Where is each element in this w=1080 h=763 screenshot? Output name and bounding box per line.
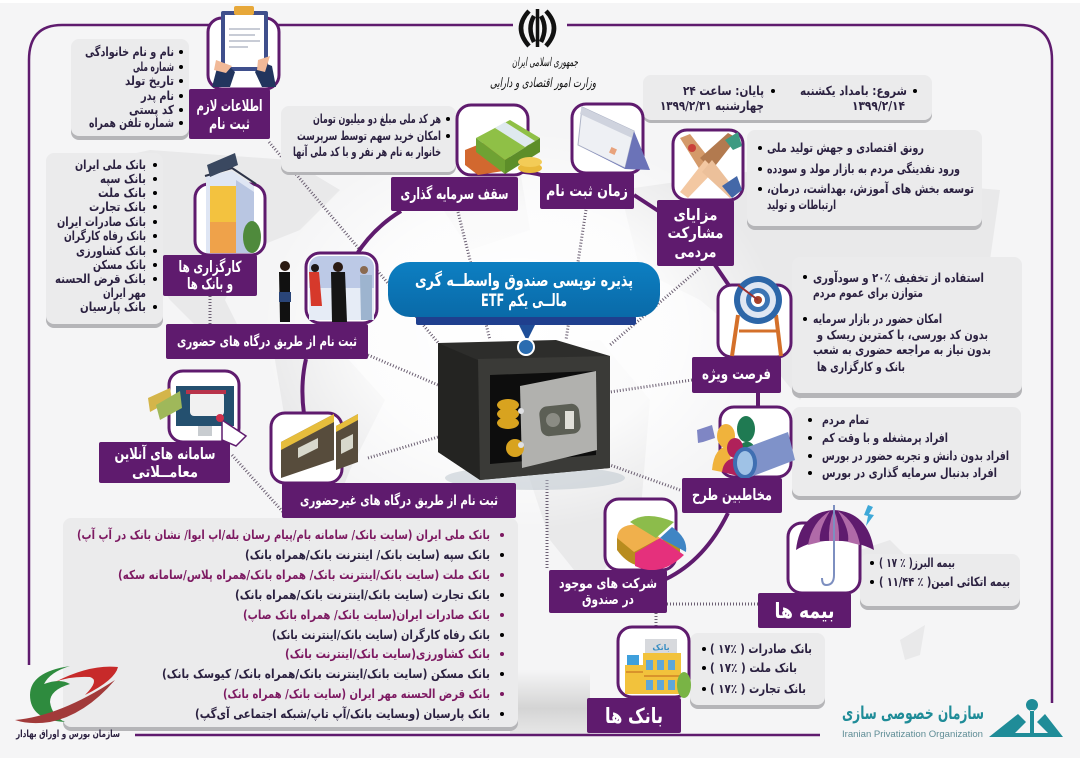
list: تمام مردم: [822, 412, 869, 428]
heading: banks: [587, 698, 681, 733]
list: افراد بدنبال سرمایه گذاری در بورس: [822, 465, 997, 480]
list: بانک پارسیان: [80, 299, 146, 314]
list: بانک سپه (سایت بانک/ اینترنت بانک/همراه بانک): [245, 547, 490, 562]
panel: benefits of participation: [747, 130, 982, 230]
panel: special opportunity: [792, 257, 1022, 398]
ministry emblem and title: [490, 9, 596, 91]
list: تاریخ تولد: [125, 73, 174, 88]
start date: شروع: بامداد یکشنبه: [800, 83, 907, 98]
start date: ۱۳۹۹/۲/۱۴: [852, 98, 905, 113]
icon: joined hands in frame: [673, 130, 743, 200]
heading: brokers and banks: [163, 255, 257, 296]
list: نام و نام خانوادگی: [85, 44, 174, 60]
list: بیمه البرز( ٪ ۱۷ ): [879, 555, 955, 570]
icon: calendar in frame: [572, 104, 650, 173]
list: افراد بدون دانش و تجربه حضور در بورس: [822, 448, 1009, 463]
list: توسعه بخش های آموزش، بهداشت، درمان،: [767, 181, 974, 196]
icon: globe with orbit: [15, 666, 118, 723]
list: بانک تجارت ( ٪۱۷ ): [710, 681, 806, 696]
ministry name: جمهوری اسلامی ایران: [512, 55, 578, 69]
heading: online trading systems: معامــلاتی: [132, 463, 198, 481]
heading: brokers and banks: کارگزاری ها: [178, 257, 242, 276]
icon: umbrella in frame: [788, 505, 874, 593]
logo: privatization organization: [842, 699, 1063, 740]
list: بدون کد بورسی، با کمترین ریسک و: [816, 327, 988, 342]
list: [808, 412, 1009, 480]
heading: fund companies: [549, 570, 667, 613]
organization name: سازمان خصوصی سازی: [842, 703, 984, 724]
list: بانک سپه: [100, 171, 146, 186]
list: مهر ایران: [103, 285, 146, 300]
list: بانک رفاه کارگران: [64, 228, 146, 243]
panel: target audience: [792, 407, 1021, 500]
heading: registration time: [540, 173, 634, 209]
icon: pie chart in frame: [605, 499, 686, 570]
list: بانک تجارت: [89, 199, 146, 214]
list: نام پدر: [140, 88, 174, 104]
icon: safe with gold coins: [438, 339, 625, 490]
list: ورود نقدینگی مردم به بازار مولد و سودده: [767, 161, 960, 177]
list: بانک قرض الحسنه مهر ایران (سایت بانک/ همراه بانک): [223, 686, 490, 701]
list: بانک ملی ایران: [75, 157, 146, 172]
list: بانک صادرات ایران: [57, 214, 146, 229]
list: هر کد ملی مبلغ دو میلیون تومان: [313, 111, 441, 126]
list: [803, 270, 991, 374]
heading: special opportunity: [692, 357, 781, 393]
icon: online trading screen in frame: [148, 371, 246, 446]
list: استفاده از تخفیف ٪۲۰ و سودآوری: [813, 270, 984, 285]
icon: emblem: [521, 9, 554, 47]
list: بانک ملت: [98, 185, 146, 200]
list: امکان خرید سهم توسط سرپرست: [297, 128, 441, 143]
icon: bank building in frame: [195, 153, 265, 255]
heading: target audience: [682, 478, 782, 513]
heading: remote registration: ثبت نام از طریق درگاه های غیرحضوری: [300, 492, 498, 509]
panel: required registration info: [71, 39, 189, 140]
panel: online portal list by bank: [63, 518, 518, 731]
heading: benefits: [657, 200, 734, 266]
icon: bank building with sign in frame: بانک: [652, 643, 670, 652]
icon: people at counter in frame: [279, 253, 377, 323]
heading: investment ceiling: [391, 177, 518, 211]
heading: online trading systems: [99, 442, 230, 483]
start date: [800, 83, 917, 113]
list: [702, 641, 812, 696]
organization name: سازمان بورس و اوراق بهادار: [15, 729, 120, 740]
heading: in-person registration: ثبت نام از طریق درگاه های حضوری: [177, 333, 357, 350]
list: بانک صادرات ایران(سایت بانک/ همراه بانک صاپ): [243, 607, 490, 622]
heading: remote registration: [282, 483, 516, 518]
world map backdrop: [60, 150, 1000, 660]
list: شماره تلفن همراه: [89, 115, 174, 130]
dotted connectors: [210, 142, 758, 626]
list: شماره ملی: [133, 59, 174, 74]
heading: insurers: بیمه ها: [774, 599, 834, 623]
list: ارتباطات و تولید: [767, 197, 836, 212]
heading: required info: ثبت نام: [209, 115, 250, 133]
list: [77, 527, 504, 721]
end date: [660, 83, 775, 113]
list: بیمه اتکائی امین( ٪ ۱۱/۴۴ ): [879, 574, 1010, 589]
main title banner: مالــی یکم ETF: [481, 291, 567, 311]
icon: bank building with sign in frame: [618, 627, 691, 698]
list: بانک قرض الحسنه: [55, 271, 146, 286]
ministry emblem and title: وزارت امور اقتصادی و دارایی: [490, 76, 596, 91]
list: [870, 555, 1010, 589]
list: خانوار به نام هر نفر و با کد ملی آنها: [293, 144, 441, 160]
heading: online trading systems: سامانه های آنلاین: [114, 444, 216, 463]
heading: benefits: مردمی: [674, 243, 716, 261]
heading: fund companies: در صندوق: [582, 592, 634, 608]
organization name in English: Iranian Privatization Organization: [842, 729, 983, 740]
title text: پذیره نویسی صندوق واسطــه گری: [415, 270, 633, 291]
list: بانک مسکن (سایت بانک/اینترنت بانک/همراه بانک/ کیوسک بانک): [162, 666, 490, 681]
list: [293, 111, 450, 160]
end date: چهارشنبه ۱۳۹۹/۲/۳۱: [660, 98, 764, 113]
list: افراد پرمشغله و با وقت کم: [822, 430, 948, 445]
heading: required info: [189, 89, 270, 139]
list: بدون نیاز به مراجعه حضوری به شعب: [813, 342, 991, 357]
list: بانک ملت (سایت بانک/اینترنت بانک/ همراه بانک/همراه پلاس/سامانه سکه): [118, 567, 490, 582]
heading: registration time: زمان ثبت نام: [546, 182, 628, 200]
heading: investment ceiling: سقف سرمایه گذاری: [400, 184, 508, 203]
list: رونق اقتصادی و جهش تولید ملی: [767, 140, 924, 155]
heading: benefits: مشارکت: [668, 224, 724, 242]
icon: clipboard in frame: [208, 6, 279, 89]
heading: insurers: [758, 593, 851, 628]
panel: banks and brokers list: [46, 153, 163, 328]
heading: required info: اطلاعات لازم: [196, 97, 262, 115]
icon: online portals in frame: [271, 413, 358, 483]
heading: brokers and banks: و بانک ها: [187, 275, 233, 293]
solid connectors: [302, 172, 758, 579]
list: بانک مسکن: [93, 257, 146, 272]
panel: investment ceiling: [281, 106, 456, 175]
icon: privatization emblem: [989, 699, 1063, 737]
heading: fund companies: شرکت های موجود: [559, 576, 657, 592]
list: بانک ملی ایران (سایت بانک/ سامانه بام/پیام رسان بله/اپ ایوا/ نشان بانک در آپ آپ): [77, 527, 490, 543]
panel: registration dates: [643, 75, 932, 123]
end date: پایان: ساعت ۲۴: [683, 83, 764, 98]
list: بانک تجارت (سایت بانک/اینترنت بانک/همراه بانک): [235, 587, 490, 602]
list: بانک کشاورزی(سایت بانک/اینترنت بانک): [285, 646, 490, 661]
icon: target in frame: [718, 276, 791, 357]
list: [55, 157, 157, 314]
heading: target audience: مخاطبین طرح: [692, 486, 772, 504]
icon: money stack in frame: [457, 105, 542, 175]
main title banner: [388, 262, 660, 341]
list: بانک صادرات ( ٪۱۷ ): [710, 641, 812, 656]
list: [85, 44, 183, 130]
list: بانک رفاه کارگران (سایت بانک/اینترنت بانک): [272, 627, 490, 642]
heading: special opportunity: فرصت ویژه: [702, 365, 771, 383]
list: کد پستی: [129, 102, 175, 117]
heading: in-person registration: [166, 324, 368, 359]
list: بانک کشاورزی: [76, 243, 146, 258]
list: متوازن برای عموم مردم: [813, 285, 923, 301]
logo: securities organization: [15, 666, 120, 740]
list: [758, 140, 974, 212]
heading: banks: بانک ها: [605, 704, 663, 728]
panel: insurers: [860, 554, 1020, 610]
title pointer: [519, 325, 535, 341]
panel: banks shares: [690, 633, 825, 709]
list: بانک پارسیان (وبسایت بانک/آپ تاپ/شبکه اجتماعی آی‌گپ): [195, 706, 490, 721]
list: بانک ملت ( ٪۱۷ ): [710, 660, 797, 675]
list: بانک و کارگزاری ها: [817, 359, 905, 374]
heading: benefits: مزایای: [674, 206, 718, 224]
icon: megaphone and people in frame: [697, 407, 795, 479]
list: امکان حضور در بازار سرمایه: [813, 311, 942, 326]
